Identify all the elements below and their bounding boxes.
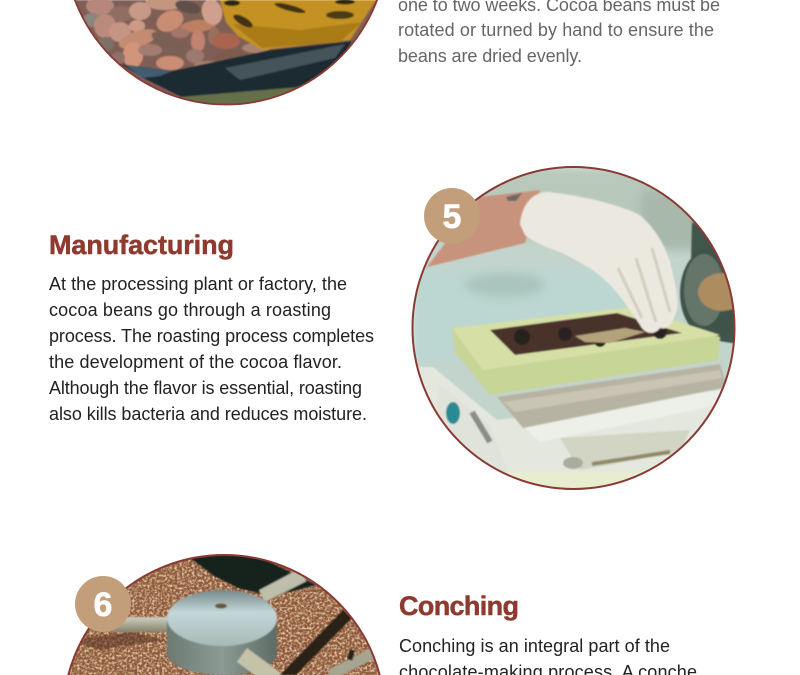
text: manufacturing description: also kills bacteria and reduces moisture.	[49, 404, 367, 424]
badge: step 5: 5	[443, 198, 461, 236]
text: conching description: Conching is an integral part of the	[399, 636, 670, 656]
text: manufacturing description: cocoa beans go through a roasting	[49, 300, 331, 320]
badge: step 5	[424, 188, 480, 244]
text: manufacturing description: At the processing plant or factory, the	[49, 274, 347, 294]
badge: step 6: 6	[94, 586, 112, 624]
text: manufacturing description: process. The roasting process completes	[49, 326, 374, 346]
photo: conche machine mixing chocolate	[67, 554, 381, 675]
heading: Manufacturing: Manufacturing	[49, 230, 234, 260]
text: drying description: beans are dried evenly.	[398, 46, 582, 66]
text: conching description	[399, 636, 697, 675]
text: manufacturing description	[49, 274, 374, 424]
badge: step 6	[75, 576, 131, 632]
text: drying description: rotated or turned by hand to ensure the	[398, 20, 714, 40]
heading: Conching: Conching	[399, 591, 519, 621]
photo: cocoa beans drying beside a yellow pod	[74, 0, 378, 106]
text: manufacturing description: the development of the cocoa flavor.	[49, 352, 342, 372]
photo: gloved hand topping a chocolate bar on a scale	[410, 165, 746, 495]
text: manufacturing description: Although the flavor is essential, roasting	[49, 378, 362, 398]
text: drying description	[398, 0, 720, 66]
